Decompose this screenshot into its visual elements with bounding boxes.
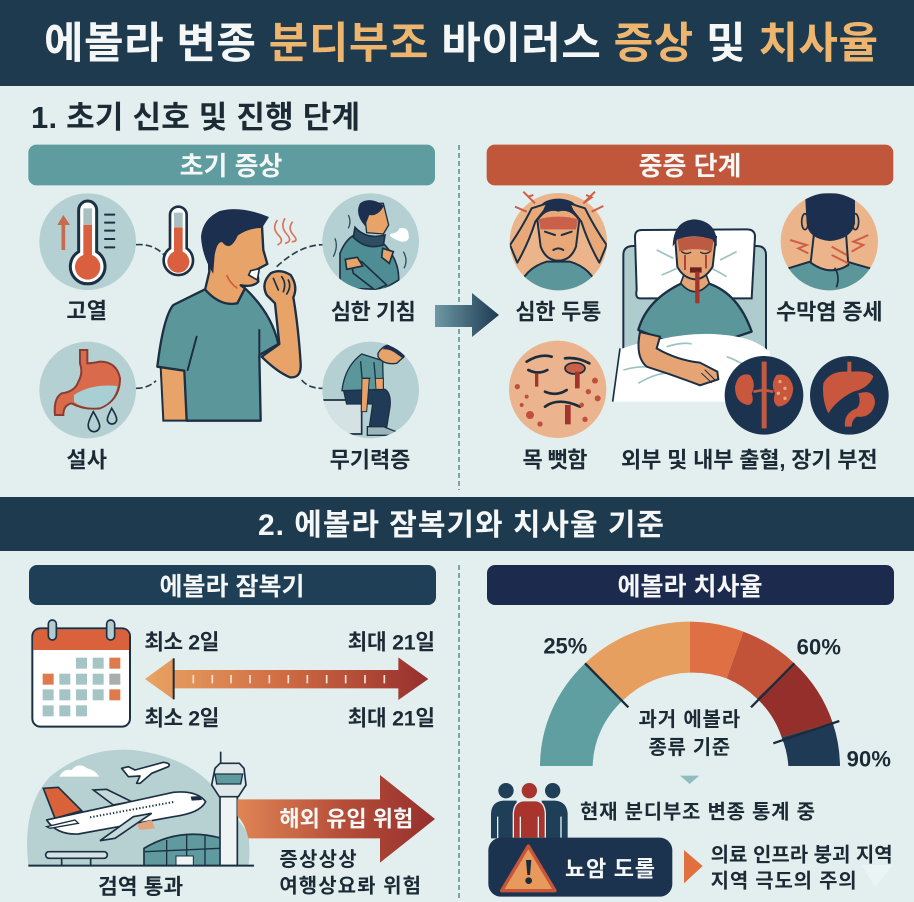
text: travel risk note — [279, 848, 421, 898]
banner: section 2 heading: 2. 에볼라 잠복기와 치사율 기준 — [258, 509, 664, 542]
icon: severe headache — [510, 192, 607, 293]
label: bleeding and organ failure: 외부 및 내부 출혈, 장기 부전 — [621, 447, 878, 472]
label: diarrhea: 설사 — [66, 447, 107, 472]
icon: small thermometer — [164, 207, 193, 275]
illustration: airport and plane — [27, 750, 254, 866]
text: current statistics: 현재 분디부조 변종 통계 중 — [580, 800, 815, 823]
text: warning note — [711, 844, 893, 892]
label: stiff neck: 목 뻣함 — [522, 447, 587, 472]
heading: section 1: 1. 초기 신호 및 진행 단계 — [31, 100, 360, 135]
arrow marker — [684, 850, 703, 883]
early symptoms header — [28, 145, 435, 185]
panel: severe stage — [487, 145, 893, 472]
panel: early symptoms — [28, 145, 435, 472]
gauge centre label: 종류 기준 — [648, 736, 730, 759]
text: travel risk note: 여행상요롸 위험 — [279, 875, 421, 898]
icon: diarrhea stomach — [39, 342, 136, 438]
icon: liver and stomach — [810, 356, 889, 435]
label: lethargy: 무기력증 — [330, 447, 410, 472]
incubation header: 에볼라 잠복기 — [160, 573, 304, 601]
icon: calendar — [32, 620, 130, 727]
label: severe cough: 심한 기침 — [331, 299, 416, 324]
gauge percent labels: 90% — [847, 747, 891, 772]
panel: incubation period — [27, 620, 435, 899]
warning box: 뇨암 도롤 — [565, 857, 655, 882]
text: warning note: 지역 극도의 주의 — [711, 869, 857, 892]
text: warning note: 의료 인프라 붕괴 지역 — [711, 844, 893, 867]
early symptoms header: 초기 증상 — [180, 151, 283, 181]
gauge centre label — [638, 708, 740, 759]
title banner — [0, 0, 914, 86]
labels: minimum and maximum — [144, 630, 435, 730]
gauge centre label: 과거 에볼라 — [638, 708, 740, 731]
icon: severe cough — [322, 193, 419, 290]
icon: kidneys — [725, 356, 803, 435]
gauge chart — [540, 622, 840, 766]
dashed connectors — [136, 245, 323, 388]
icon: stiff neck face with bleeding — [509, 341, 606, 438]
illustration: coughing man — [157, 210, 301, 421]
incubation header — [29, 565, 436, 605]
labels: minimum and maximum: 최소 2일 — [144, 706, 219, 730]
banner: section 2 heading — [0, 497, 914, 551]
panel: fatality rate — [488, 622, 893, 897]
icon: fever thermometer — [39, 193, 136, 290]
labels: minimum and maximum: 최소 2일 — [144, 630, 219, 654]
label: quarantine passage: 검역 통과 — [98, 875, 184, 899]
arrow: overseas import risk: 해외 유입 위험 — [279, 807, 413, 832]
gauge percent labels: 60% — [797, 634, 841, 659]
severe stage header — [487, 145, 893, 185]
label: severe headache: 심한 두통 — [515, 299, 601, 324]
fatality header — [487, 565, 894, 605]
arrow: overseas import risk — [237, 775, 435, 863]
gauge percent labels: 25% — [543, 633, 587, 658]
labels: minimum and maximum: 최대 21일 — [348, 630, 435, 654]
timeline arrow — [145, 657, 428, 700]
pointer triangle — [680, 776, 699, 784]
icon: meningitis neck — [780, 193, 880, 293]
fatality header: 에볼라 치사율 — [618, 573, 762, 601]
icon: people — [491, 783, 568, 838]
title banner: 에볼라 변종 분디부조 바이러스 증상 및 치사율 — [44, 20, 878, 68]
label: high fever: 고열 — [66, 298, 107, 323]
labels: minimum and maximum: 최대 21일 — [348, 706, 435, 730]
icon: lethargy — [322, 341, 419, 438]
warning box — [488, 838, 672, 897]
text: travel risk note: 증상상상 — [279, 848, 357, 871]
faint watermark — [862, 865, 893, 887]
label: meningitis symptoms: 수막염 증세 — [776, 299, 883, 324]
arrow: progression — [435, 293, 499, 337]
gauge percent labels — [543, 633, 891, 772]
severe stage header: 중증 단계 — [639, 151, 741, 181]
illustration: bedridden patient — [613, 219, 782, 402]
